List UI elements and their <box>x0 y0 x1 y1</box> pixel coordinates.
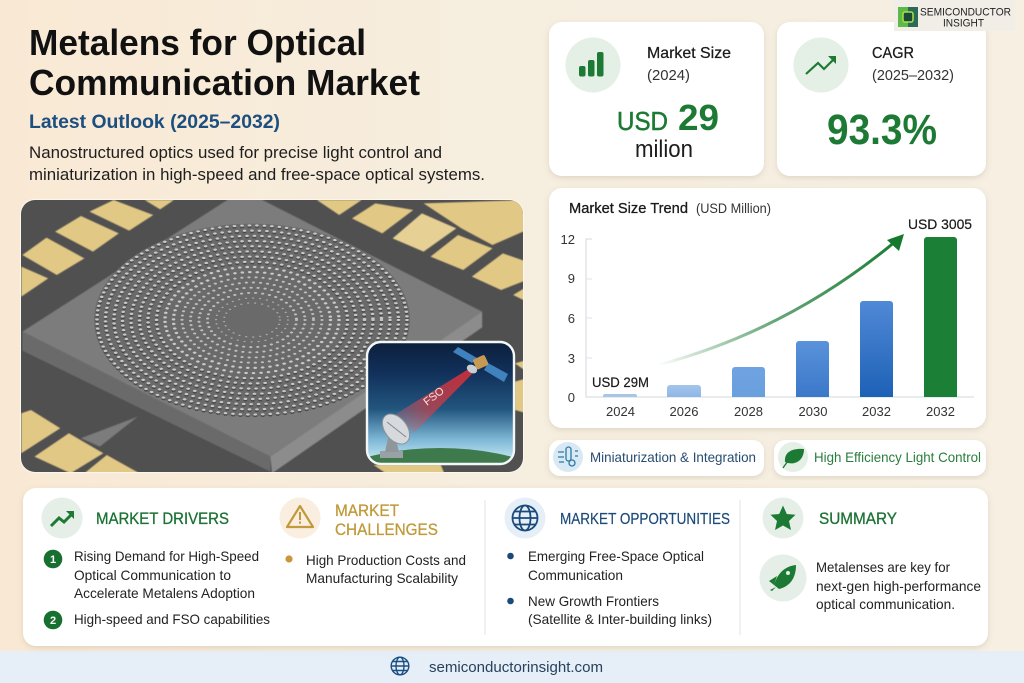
driver 1 <box>44 548 259 601</box>
icon: chip logo <box>898 7 918 27</box>
panel: CAGR: (2025–2032) <box>872 67 954 84</box>
satellite <box>453 347 508 382</box>
panel: footer bar <box>0 651 1024 683</box>
panel: bottom sections <box>23 488 988 646</box>
section: market opportunities: New Growth Frontiers <box>528 593 659 609</box>
section: market challenges: High Production Costs and <box>306 552 466 568</box>
x axis labels <box>606 404 955 419</box>
value: 29 <box>678 97 719 138</box>
y axis labels <box>561 232 575 405</box>
description <box>29 143 485 184</box>
driver 1: Rising Demand for High-Speed <box>74 548 259 564</box>
panel: market size: Market Size <box>647 45 731 62</box>
section: market opportunities: MARKET OPPORTUNITIES <box>560 511 730 528</box>
section: market challenges: Manufacturing Scalability <box>306 570 458 586</box>
title <box>29 22 420 103</box>
section: summary <box>760 498 981 612</box>
title: Metalens for Optical <box>29 22 366 63</box>
driver 1: Optical Communication to <box>74 567 231 583</box>
bars <box>603 237 957 397</box>
pill: high efficiency light control <box>774 440 986 476</box>
x axis labels: 2024 <box>606 404 635 419</box>
laser beam <box>391 370 472 432</box>
FSO label: FSO <box>421 385 447 408</box>
section: market opportunities: Emerging Free-Space Optical <box>528 548 704 564</box>
x axis labels: 2032 <box>926 404 955 419</box>
gold contact pads <box>21 200 527 473</box>
driver 2: 2 <box>50 615 56 627</box>
section: market drivers <box>42 498 270 629</box>
icon: rocket <box>760 554 806 602</box>
section: market challenges: CHALLENGES <box>335 520 438 539</box>
section: market opportunities: (Satellite & Inter-building links) <box>528 611 712 627</box>
panel: CAGR: 93.3% <box>827 106 937 154</box>
panel: market size: (2024) <box>647 67 690 84</box>
driver 1: 1 <box>50 554 56 566</box>
panel: footer bar: semiconductorinsight.com <box>429 659 603 676</box>
inset: free-space optical link <box>366 340 516 466</box>
data labels: USD 3005 <box>908 216 972 232</box>
chip block <box>22 190 482 473</box>
logo: SEMICONDUCTOR <box>920 6 1011 18</box>
y axis labels: 6 <box>568 311 575 326</box>
ground dish <box>380 414 410 458</box>
y axis labels: 0 <box>568 390 575 405</box>
logo: INSIGHT <box>943 18 984 30</box>
chart heading: Market Size Trend <box>569 201 688 217</box>
chart heading: (USD Million) <box>696 201 771 216</box>
panel: market size trend chart <box>549 188 986 428</box>
section: market opportunities <box>504 498 730 627</box>
value: milion <box>635 136 693 163</box>
icon: trend arrow <box>794 38 848 92</box>
title: Communication Market <box>29 62 420 103</box>
data labels: USD 29M <box>592 374 649 390</box>
driver 2: High-speed and FSO capabilities <box>74 611 270 627</box>
icon: star <box>762 498 804 538</box>
icon: globe <box>391 657 409 675</box>
y axis labels: 9 <box>568 271 575 286</box>
value: USD <box>617 106 668 136</box>
section: market challenges <box>280 498 466 586</box>
icon: leaf <box>778 442 808 472</box>
ground <box>370 448 511 463</box>
section: summary: Metalenses are key for <box>816 559 950 575</box>
subtitle: Latest Outlook (2025–2032) <box>29 112 280 133</box>
panel: CAGR <box>777 22 986 176</box>
pill: miniaturization and integration <box>549 440 764 476</box>
y axis labels: 3 <box>568 351 575 366</box>
panel: metalens photo <box>20 199 524 473</box>
driver 1: Accelerate Metalens Adoption <box>74 585 255 601</box>
section: summary: optical communication. <box>816 596 955 612</box>
x axis labels: 2028 <box>734 404 763 419</box>
icon: warning triangle <box>280 498 320 538</box>
logo <box>894 0 1015 31</box>
metalens nano-pillar rings <box>94 224 410 416</box>
icon: bar chart <box>566 38 620 92</box>
data labels <box>592 216 972 390</box>
value <box>617 97 719 163</box>
icon: miniaturization <box>553 442 583 472</box>
section: market drivers: MARKET DRIVERS <box>96 510 229 528</box>
description: Nanostructured optics used for precise light control and <box>29 143 442 162</box>
description: miniaturization in high-speed and free-space optical systems. <box>29 165 485 184</box>
icon: drivers arrow <box>42 498 82 538</box>
x axis labels: 2026 <box>670 404 698 419</box>
x axis labels: 2030 <box>799 404 827 419</box>
growth arrow <box>658 234 904 365</box>
icon: opportunities globe <box>504 498 546 538</box>
section: summary: next-gen high-performance <box>816 578 981 594</box>
axes <box>586 239 974 397</box>
section: market opportunities: Communication <box>528 567 623 583</box>
pill: miniaturization and integration: Miniaturization & Integration <box>590 449 756 465</box>
panel: market size <box>549 22 764 176</box>
pill: high efficiency light control: High Efficiency Light Control <box>814 449 981 465</box>
x axis labels: 2032 <box>862 404 891 419</box>
section: summary: SUMMARY <box>819 510 897 528</box>
y axis labels: 12 <box>561 232 575 247</box>
section: market challenges: MARKET <box>335 501 399 520</box>
chart heading <box>569 201 771 217</box>
panel: CAGR: CAGR <box>872 45 914 62</box>
